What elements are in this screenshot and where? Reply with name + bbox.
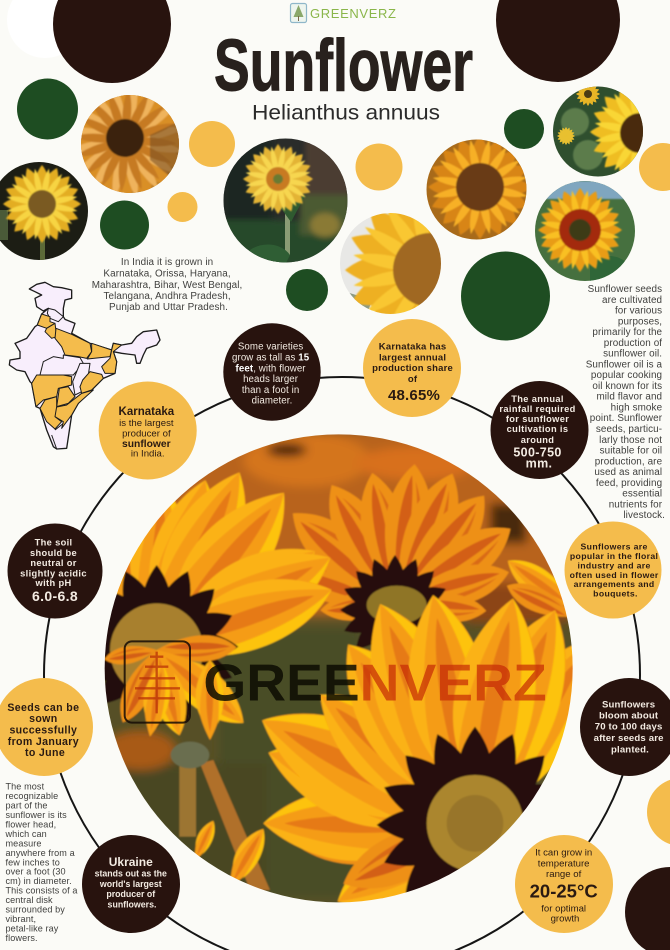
photo: deep orange sunflower bbox=[426, 140, 526, 240]
callout: floral industry: Sunflowers are bbox=[581, 542, 648, 552]
callout: production share: Karnataka has bbox=[379, 342, 446, 352]
callout: plant height: diameter. bbox=[252, 396, 292, 406]
callout: production share: of bbox=[408, 374, 418, 385]
callout: floral industry: industry and are bbox=[578, 560, 651, 570]
callout: Ukraine: world's largest bbox=[99, 879, 162, 889]
photo: sunflowers in green field bbox=[553, 86, 643, 176]
logo: GREENVERZ bbox=[310, 6, 396, 21]
callout: production share: production share bbox=[372, 363, 453, 374]
text: uses of sunflower seeds: for various bbox=[615, 306, 662, 317]
callout: soil pH: should be bbox=[30, 548, 77, 558]
callout: annual rainfall: The annual bbox=[511, 394, 564, 404]
callout: temperature: It can grow in bbox=[535, 848, 592, 858]
photo: close-up sunflower bbox=[340, 213, 441, 314]
callout: sowing time: Seeds can be bbox=[7, 702, 79, 714]
text: uses of sunflower seeds: primarily for the bbox=[592, 327, 663, 338]
text: uses of sunflower seeds: essential bbox=[622, 489, 662, 500]
text: flower head description: few inches to bbox=[6, 857, 60, 867]
text: flower head description: The most bbox=[6, 782, 45, 792]
callout: Ukraine bbox=[82, 835, 180, 933]
callout: annual rainfall: for sunflower bbox=[506, 414, 569, 424]
text: uses of sunflower seeds: high smoke bbox=[611, 402, 663, 413]
text: uses of sunflower seeds: livestock. bbox=[623, 510, 665, 521]
right-edge petals bbox=[506, 559, 567, 618]
callout: plant height: Some varieties bbox=[238, 342, 303, 352]
callout: annual rainfall: around bbox=[521, 435, 554, 445]
callout: floral industry: often used in flower bbox=[570, 570, 659, 580]
callout: plant height: than a foot in bbox=[242, 385, 299, 396]
callout: annual rainfall: rainfall required bbox=[499, 404, 576, 414]
flower, lower right bbox=[261, 594, 573, 902]
callout: sowing time: from January bbox=[8, 736, 79, 748]
callout: temperature: temperature bbox=[538, 858, 590, 870]
callout: soil pH: slightly acidic bbox=[20, 568, 87, 578]
callout: production share: largest annual bbox=[379, 352, 446, 364]
callout: Karnataka largest producer: is the largest bbox=[119, 418, 174, 429]
callout: bloom time bbox=[580, 678, 670, 776]
callout: soil pH: The soil bbox=[35, 538, 72, 548]
text: uses of sunflower seeds: production of bbox=[604, 338, 662, 349]
callout: temperature: 20-25°C bbox=[530, 880, 598, 902]
connecting ring bbox=[44, 377, 640, 950]
text: uses of sunflower seeds: larly those not bbox=[599, 435, 662, 446]
callout: annual rainfall: cultivation is bbox=[507, 424, 568, 434]
text: flower head description: which can bbox=[4, 829, 47, 839]
callout: plant height: grow as tall as 15 bbox=[232, 352, 309, 364]
callout: production share bbox=[363, 319, 461, 417]
callout: soil pH: with pH bbox=[35, 578, 72, 588]
callout: soil pH bbox=[8, 524, 102, 618]
text: uses of sunflower seeds: suitable for oil bbox=[600, 446, 662, 457]
callout: Ukraine: sunflowers. bbox=[108, 900, 156, 910]
text: flower head description: recognizable bbox=[6, 791, 58, 801]
callout: bloom time: bloom about bbox=[599, 710, 659, 722]
callout: floral industry bbox=[564, 522, 662, 618]
text: flower head description: part of the bbox=[6, 800, 48, 810]
text: flower head description: surrounded by bbox=[6, 905, 65, 915]
text: uses of sunflower seeds: seeds, particu- bbox=[596, 424, 662, 435]
callout: floral industry: popular in the floral bbox=[570, 551, 658, 561]
callout: bloom time: planted. bbox=[611, 744, 649, 756]
callout: sowing time: successfully bbox=[9, 724, 77, 736]
stems bbox=[171, 742, 270, 890]
text: flower head description: over a foot (30 bbox=[6, 867, 66, 877]
callout: soil pH: neutral or bbox=[30, 558, 77, 568]
text: flower head description: sunflower is its bbox=[6, 810, 67, 820]
callout: Karnataka largest producer: sunflower bbox=[122, 439, 171, 450]
text: flower head description: anywhere from a bbox=[6, 848, 76, 858]
callout: Ukraine: stands out as the bbox=[95, 868, 167, 878]
text: uses of sunflower seeds: popular cooking bbox=[591, 370, 662, 381]
callout: production share: 48.65% bbox=[388, 387, 440, 404]
text: where it is grown in India: In India it is grown in bbox=[121, 257, 213, 268]
text: flower head description: central disk bbox=[6, 895, 53, 905]
callout: Karnataka largest producer: Karnataka bbox=[119, 406, 175, 418]
text: uses of sunflower seeds: sunflower oil. bbox=[603, 349, 662, 360]
text: uses of sunflower seeds: feed, providing bbox=[596, 478, 662, 489]
text: where it is grown in India: Karnataka, Orissa, Haryana, bbox=[103, 268, 231, 280]
callout: temperature: for optimal bbox=[541, 904, 586, 914]
text: uses of sunflower seeds: point. Sunflower bbox=[590, 413, 663, 424]
text: where it is grown in India: Telangana, Andhra Pradesh, bbox=[103, 291, 231, 302]
title: Sunflower bbox=[214, 26, 473, 106]
text: flower head description: measure bbox=[6, 838, 42, 848]
flower, upper left bbox=[104, 472, 332, 740]
callout: bloom time: Sunflowers bbox=[602, 700, 655, 710]
text: uses of sunflower seeds: production, are bbox=[595, 456, 663, 467]
photo: orange sunflower bbox=[81, 95, 179, 193]
callout: sowing time bbox=[0, 678, 93, 776]
text: uses of sunflower seeds: purposes, bbox=[618, 316, 662, 327]
text: flower head description: petal-like ray bbox=[6, 924, 59, 934]
background flower, centre bbox=[292, 464, 512, 649]
callout: sowing time: to June bbox=[25, 747, 65, 759]
callout: Ukraine: Ukraine bbox=[109, 855, 153, 869]
callout: Karnataka largest producer: in India. bbox=[131, 448, 165, 460]
callout: plant height: heads larger bbox=[243, 374, 299, 385]
callout: Karnataka largest producer: producer of bbox=[122, 428, 171, 440]
callout: soil pH: 6.0-6.8 bbox=[32, 588, 78, 604]
lower-left small petals bbox=[194, 820, 266, 880]
callout: bloom time: after seeds are bbox=[594, 733, 664, 744]
logo bbox=[290, 4, 396, 22]
text: flower head description: vibrant, bbox=[6, 914, 36, 924]
text: where it is grown in India: Punjab and Uttar Pradesh. bbox=[109, 302, 228, 313]
photo: sunflower in dark garden bbox=[223, 138, 350, 265]
text: uses of sunflower seeds: Sunflower oil is a bbox=[586, 359, 663, 370]
callout: temperature: growth bbox=[551, 914, 579, 924]
callout: Karnataka largest producer bbox=[99, 382, 197, 480]
subtitle: Helianthus annuus bbox=[252, 102, 440, 124]
map of India bbox=[9, 282, 160, 449]
text: uses of sunflower seeds: nutrients for bbox=[609, 499, 663, 510]
callout: floral industry: arrangements and bbox=[574, 579, 655, 589]
callout: annual rainfall: 500-750 bbox=[513, 446, 562, 460]
watermark logo: GREENVERZ bbox=[203, 655, 547, 713]
callout: floral industry: bouquets. bbox=[593, 588, 638, 598]
callout: bloom time: 70 to 100 days bbox=[595, 722, 662, 732]
callout: temperature: range of bbox=[546, 869, 582, 880]
text: flower head description: flowers. bbox=[6, 933, 38, 943]
text: uses of sunflower seeds: Sunflower seeds bbox=[588, 284, 662, 295]
callout: plant height bbox=[223, 323, 321, 421]
text: flower head description: flower head, bbox=[6, 819, 56, 829]
callout: annual rainfall: mm. bbox=[526, 456, 552, 470]
callout: plant height: feet, with flower bbox=[236, 364, 306, 374]
callout: sowing time: sown bbox=[29, 713, 58, 725]
callout: annual rainfall bbox=[490, 381, 588, 479]
text: flower head description: cm) in diameter. bbox=[6, 876, 72, 886]
text: where it is grown in India: Maharashtra, Bihar, West Bengal, bbox=[92, 280, 242, 291]
text: uses of sunflower seeds: oil known for its bbox=[592, 381, 662, 392]
text: uses of sunflower seeds: used as animal bbox=[594, 467, 662, 478]
text: uses of sunflower seeds: are cultivated bbox=[602, 295, 662, 306]
callout: Ukraine: producer of bbox=[106, 889, 155, 899]
main photo: gazania flowers bbox=[104, 434, 573, 902]
photo: yellow sunflower on dark background bbox=[0, 160, 90, 262]
text: flower head description: This consists of a bbox=[6, 886, 78, 896]
callout: temperature bbox=[515, 835, 613, 933]
text: uses of sunflower seeds: mild flavor and bbox=[596, 392, 662, 403]
watermark logo bbox=[125, 641, 547, 723]
photo: red-ringed sunflower bbox=[535, 181, 635, 281]
